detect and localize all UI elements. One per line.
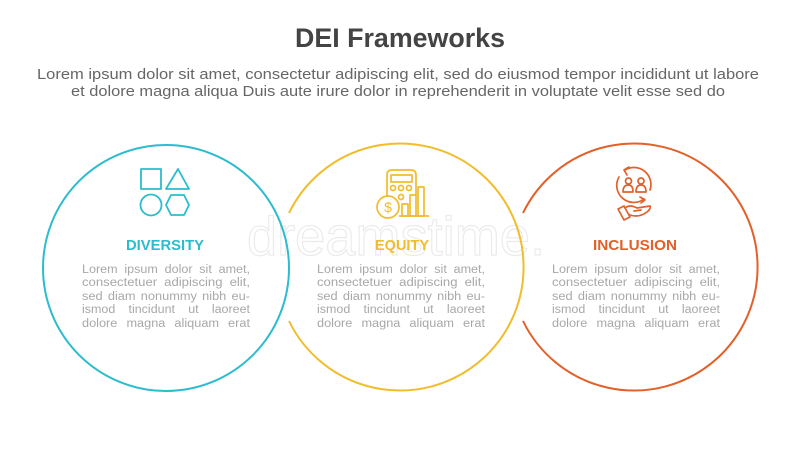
title: DEI Frameworks [295,23,505,53]
equity text: Lorem ipsum dolor sit amet, [317,264,485,276]
icon: calculator and coins [377,170,429,218]
subtitle: Lorem ipsum dolor sit amet, consectetur adipiscing elit, sed do eiusmod tempor incididunt ut labore [37,67,759,83]
equity text [317,264,486,330]
panel: equity [289,144,524,390]
inclusion text: sed diam nonummy nibh eu- [552,291,720,303]
diversity text: sed diam nonummy nibh eu- [82,291,250,303]
subtitle [37,67,759,100]
diversity text: consectetuer adipiscing elit, [82,277,250,289]
subtitle: et dolore magna aliqua Duis aute irure dolor in reprehenderit in voluptate velit esse sed do [71,84,725,100]
dollar sign: $ [384,199,392,215]
diversity heading: DIVERSITY [126,237,204,254]
inclusion arc [523,144,758,390]
diversity text [82,264,251,330]
equity arc [289,144,524,390]
inclusion text: dolore magna aliquam erat [552,318,721,330]
equity text: dolore magna aliquam erat [317,318,486,330]
watermark: dreamstime. [247,205,545,267]
inclusion heading: INCLUSION [593,237,677,254]
panel: diversity [43,145,289,391]
inclusion text: Lorem ipsum dolor sit amet, [552,264,720,276]
inclusion text: ismod tincidunt ut laoreet [552,304,721,316]
equity heading: EQUITY [375,237,429,254]
icon: people in hand [617,167,651,220]
equity text: sed diam nonummy nibh eu- [317,291,485,303]
icon: shapes [140,169,189,216]
diversity text: ismod tincidunt ut laoreet [82,304,251,316]
panel: inclusion [523,144,758,390]
equity text: ismod tincidunt ut laoreet [317,304,486,316]
diversity text: dolore magna aliquam erat [82,318,251,330]
inclusion text: consectetuer adipiscing elit, [552,277,720,289]
diversity text: Lorem ipsum dolor sit amet, [82,264,250,276]
inclusion text [552,264,721,330]
equity text: consectetuer adipiscing elit, [317,277,485,289]
diversity circle [43,145,289,391]
